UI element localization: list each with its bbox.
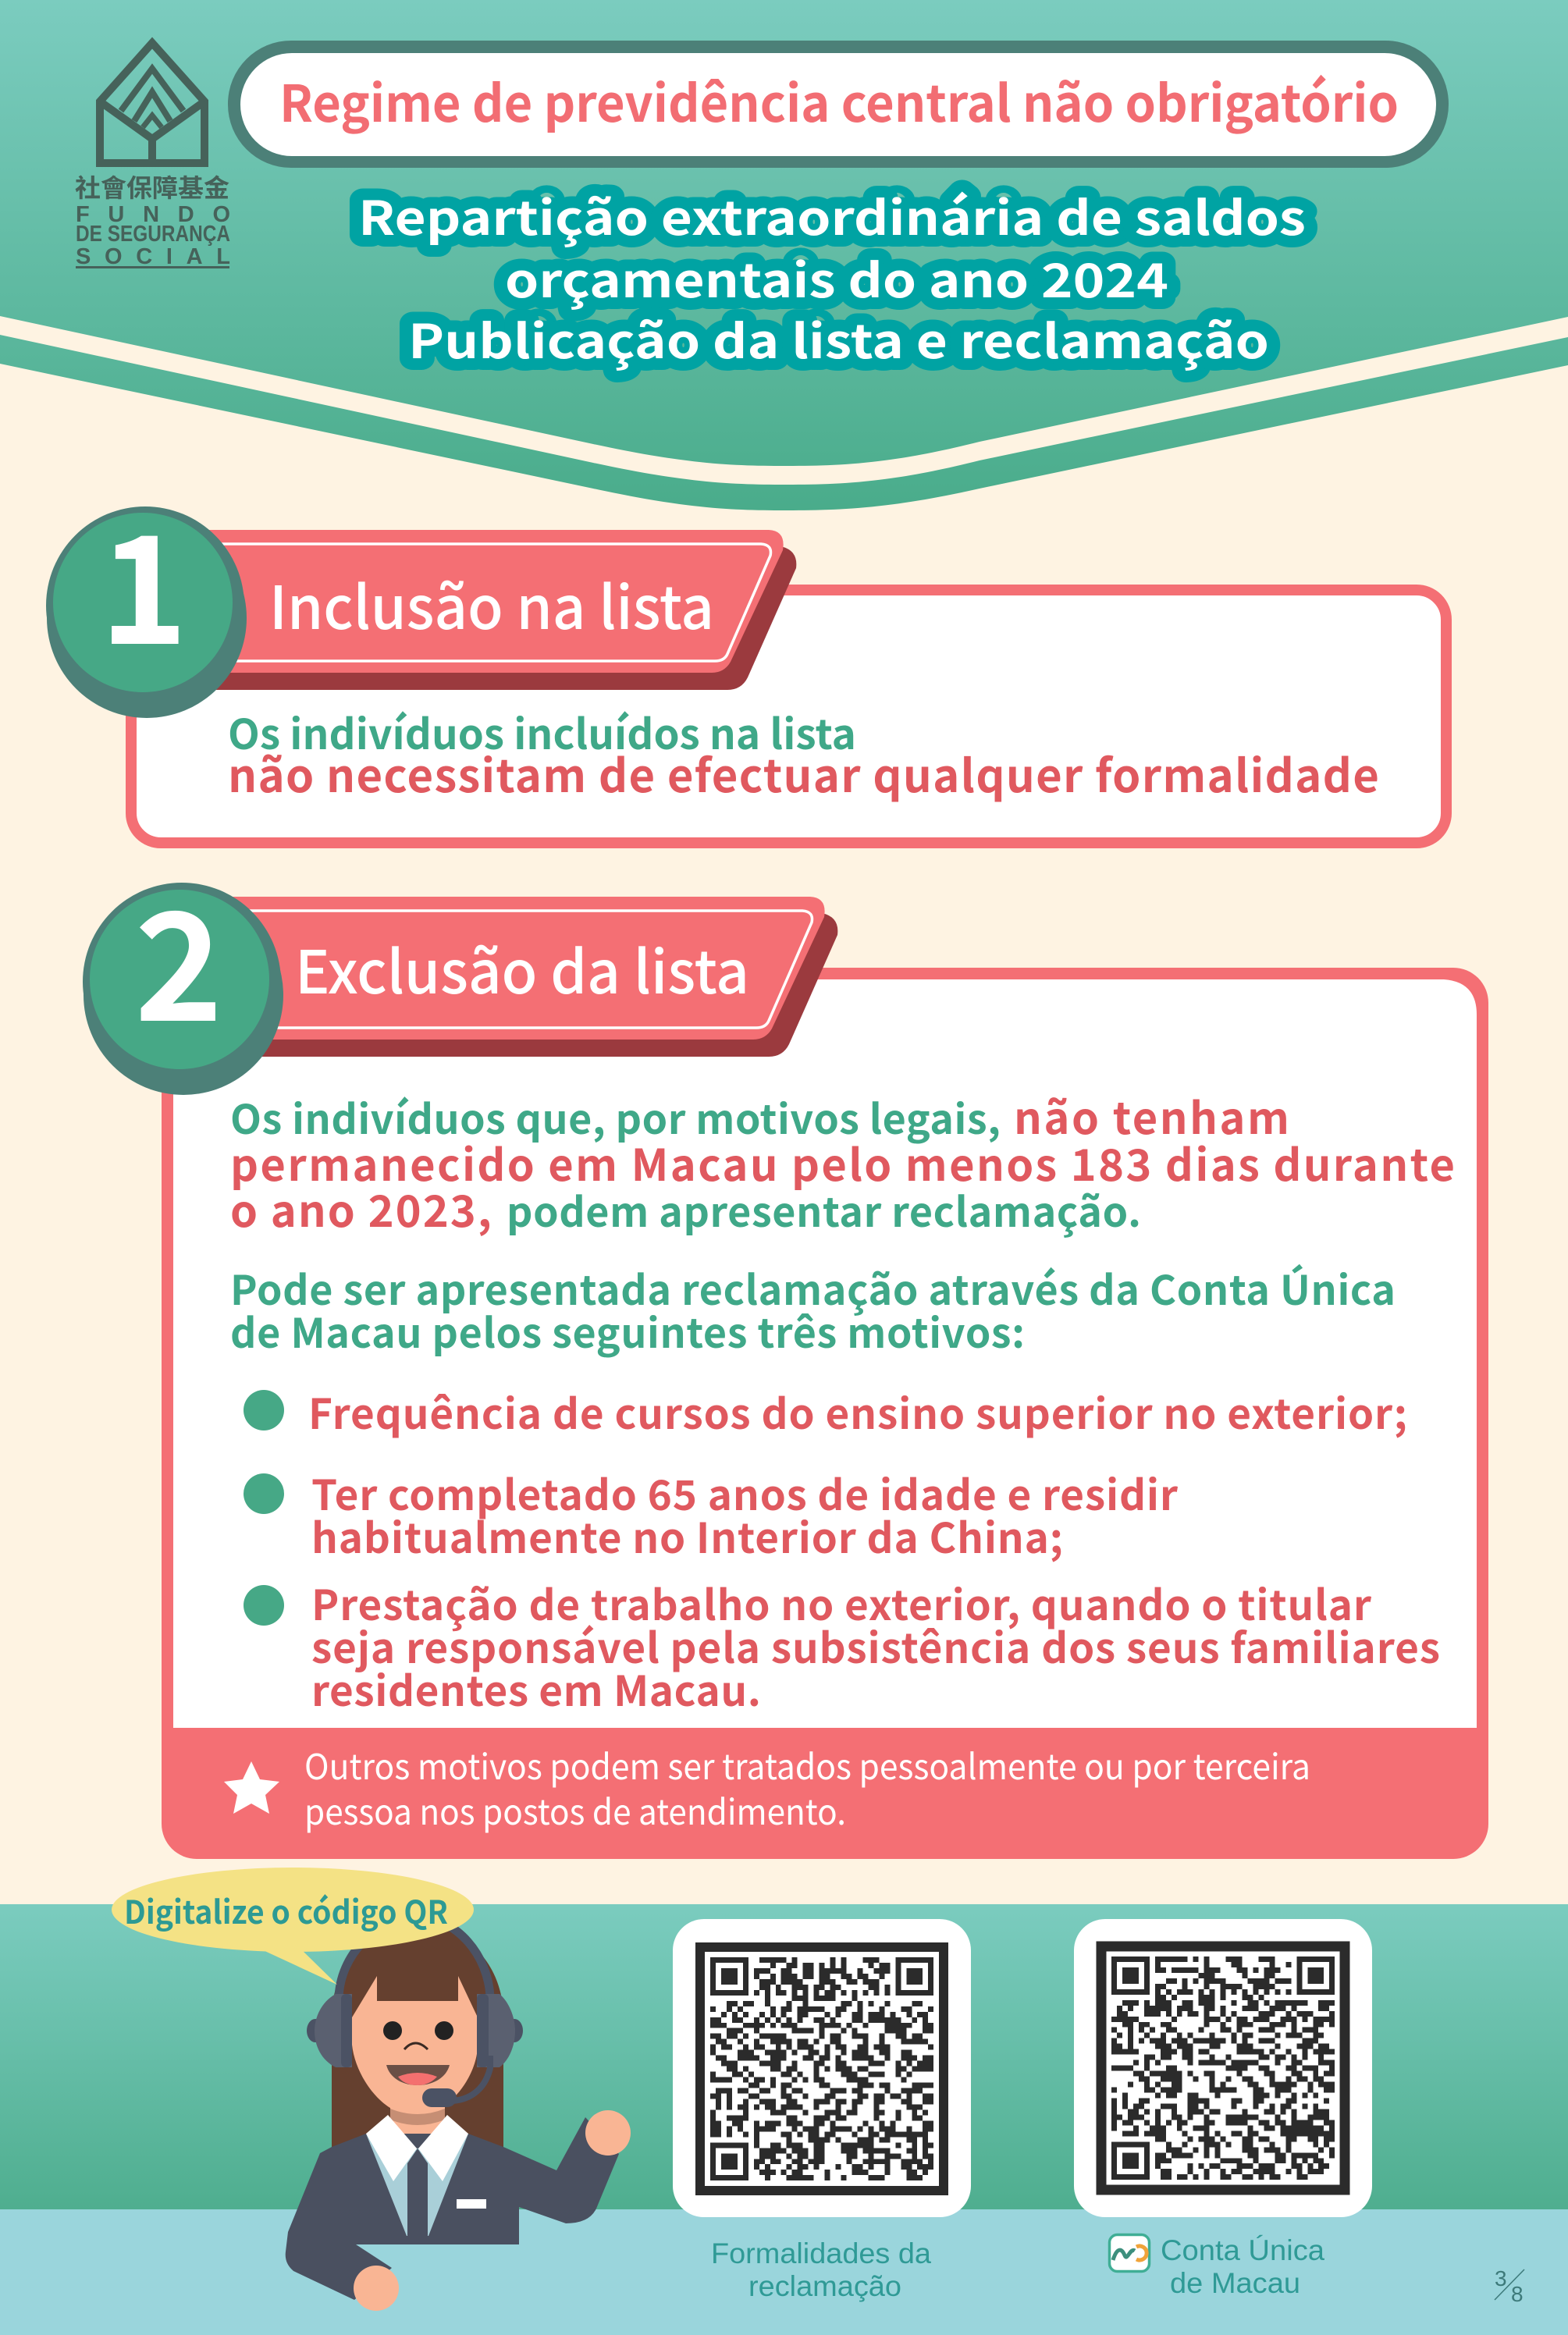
panel 1 number badge: 1 [99, 471, 188, 688]
subtitle: orçamentais do ano 2024 [505, 243, 1168, 311]
panel 1 banner: Inclusão na lista [269, 560, 714, 646]
speech bubble [112, 1868, 474, 1985]
tie [407, 2148, 428, 2237]
hair [332, 1925, 503, 2147]
footer background [0, 1904, 1568, 2335]
page number: 3 [1495, 2266, 1507, 2291]
mouth [386, 2065, 450, 2085]
neck [390, 2103, 445, 2154]
panel 2 box [162, 968, 1488, 1859]
microphone [422, 2056, 490, 2107]
title pill [228, 41, 1449, 168]
logo: Fundo de Segurança Social: SOCIAL [76, 244, 230, 269]
intro text: Os indivíduos que, por motivos legais, [230, 1087, 1001, 1146]
bullet 3: seja responsável pela subsistência dos seus familiares [311, 1616, 1440, 1676]
panel 2 banner: Exclusão da lista [295, 925, 749, 1011]
bullet 1: Frequência de cursos do ensino superior no exterior; [308, 1382, 1407, 1441]
collar [366, 2115, 468, 2181]
logo: Fundo de Segurança Social [75, 43, 230, 269]
bullet 2: Ter completado 65 anos de idade e residir [311, 1463, 1179, 1523]
panel 1 text: Os indivíduos incluídos na lista [228, 702, 856, 762]
panel 1 text [228, 702, 1379, 805]
QR code: Conta Única de Macau [1074, 1919, 1372, 2217]
panel 2 number badge: 2 [134, 848, 223, 1064]
intro text: o ano 2023, [230, 1177, 492, 1240]
subtitle [358, 181, 1306, 372]
bullet 2 [244, 1463, 1179, 1566]
panel 2 number badge [83, 848, 283, 1095]
reasons heading: de Macau pelos seguintes três motivos: [230, 1301, 1025, 1359]
bullet 3: residentes em Macau. [311, 1659, 761, 1718]
eyes and nose [383, 2021, 453, 2049]
caption: Conta Única de Macau: de Macau [1170, 2267, 1300, 2299]
logo: Fundo de Segurança Social: 社會保障基金 [75, 169, 229, 204]
illustration: call-centre agent [286, 1916, 631, 2311]
intro text: podem apresentar reclamação. [507, 1180, 1141, 1239]
panel: exclusão da lista [83, 848, 1488, 1859]
title pill: Regime de previdência central não obrigatório [279, 63, 1399, 137]
hands [354, 2110, 631, 2311]
page number [1495, 2266, 1524, 2306]
suit [286, 2117, 619, 2300]
panel 1 box [131, 590, 1446, 843]
shirt [366, 2134, 468, 2236]
QR code: formalidades da reclamação [673, 1919, 971, 2217]
header band [0, 0, 1568, 510]
bullet 2: habitualmente no Interior da China; [311, 1506, 1063, 1566]
reasons heading: Pode ser apresentada reclamação através da Conta Única [230, 1258, 1396, 1317]
bullet 3 [244, 1573, 1440, 1718]
logo: Fundo de Segurança Social: DE SEGURANÇA [76, 222, 230, 247]
face [352, 1976, 478, 2116]
logo: Fundo de Segurança Social: FUNDO [76, 202, 230, 227]
caption: Conta Única de Macau: Conta Única [1161, 2234, 1324, 2266]
panel 2 banner [211, 897, 837, 1057]
page number: 8 [1511, 2282, 1524, 2306]
caption: Conta Única de Macau [1161, 2234, 1324, 2299]
footnote text: pessoa nos postos de atendimento. [304, 1784, 846, 1835]
subtitle: Publicação da lista e reclamação [408, 304, 1269, 372]
footnote text: Outros motivos podem ser tratados pessoalmente ou por terceira [304, 1739, 1310, 1789]
icon: Conta Única app [1110, 2235, 1149, 2271]
headset band [339, 1916, 490, 1998]
caption: formalidades da reclamação: reclamação [748, 2270, 901, 2302]
panel 1 text: não necessitam de efectuar qualquer formalidade [228, 740, 1379, 805]
intro text: não tenham [1014, 1084, 1289, 1147]
panel 1 number badge [46, 471, 247, 718]
ear muffs [307, 1994, 523, 2067]
panel 1 banner [180, 530, 796, 690]
reasons heading [230, 1258, 1396, 1359]
panel: inclusão na lista [46, 471, 1446, 843]
name badge [457, 2199, 486, 2209]
subtitle: Repartição extraordinária de saldos [358, 181, 1306, 249]
footnote text [304, 1739, 1310, 1835]
caption: formalidades da reclamação: Formalidades da [711, 2237, 931, 2269]
intro text [230, 1084, 1455, 1240]
bullet 3: Prestação de trabalho no exterior, quando o titular [311, 1573, 1372, 1633]
caption: formalidades da reclamação [711, 2237, 931, 2302]
speech bubble: Digitalize o código QR [124, 1886, 448, 1933]
icon: star [224, 1761, 279, 1814]
intro text: permanecido em Macau pelo menos 183 dias durante [230, 1131, 1455, 1194]
